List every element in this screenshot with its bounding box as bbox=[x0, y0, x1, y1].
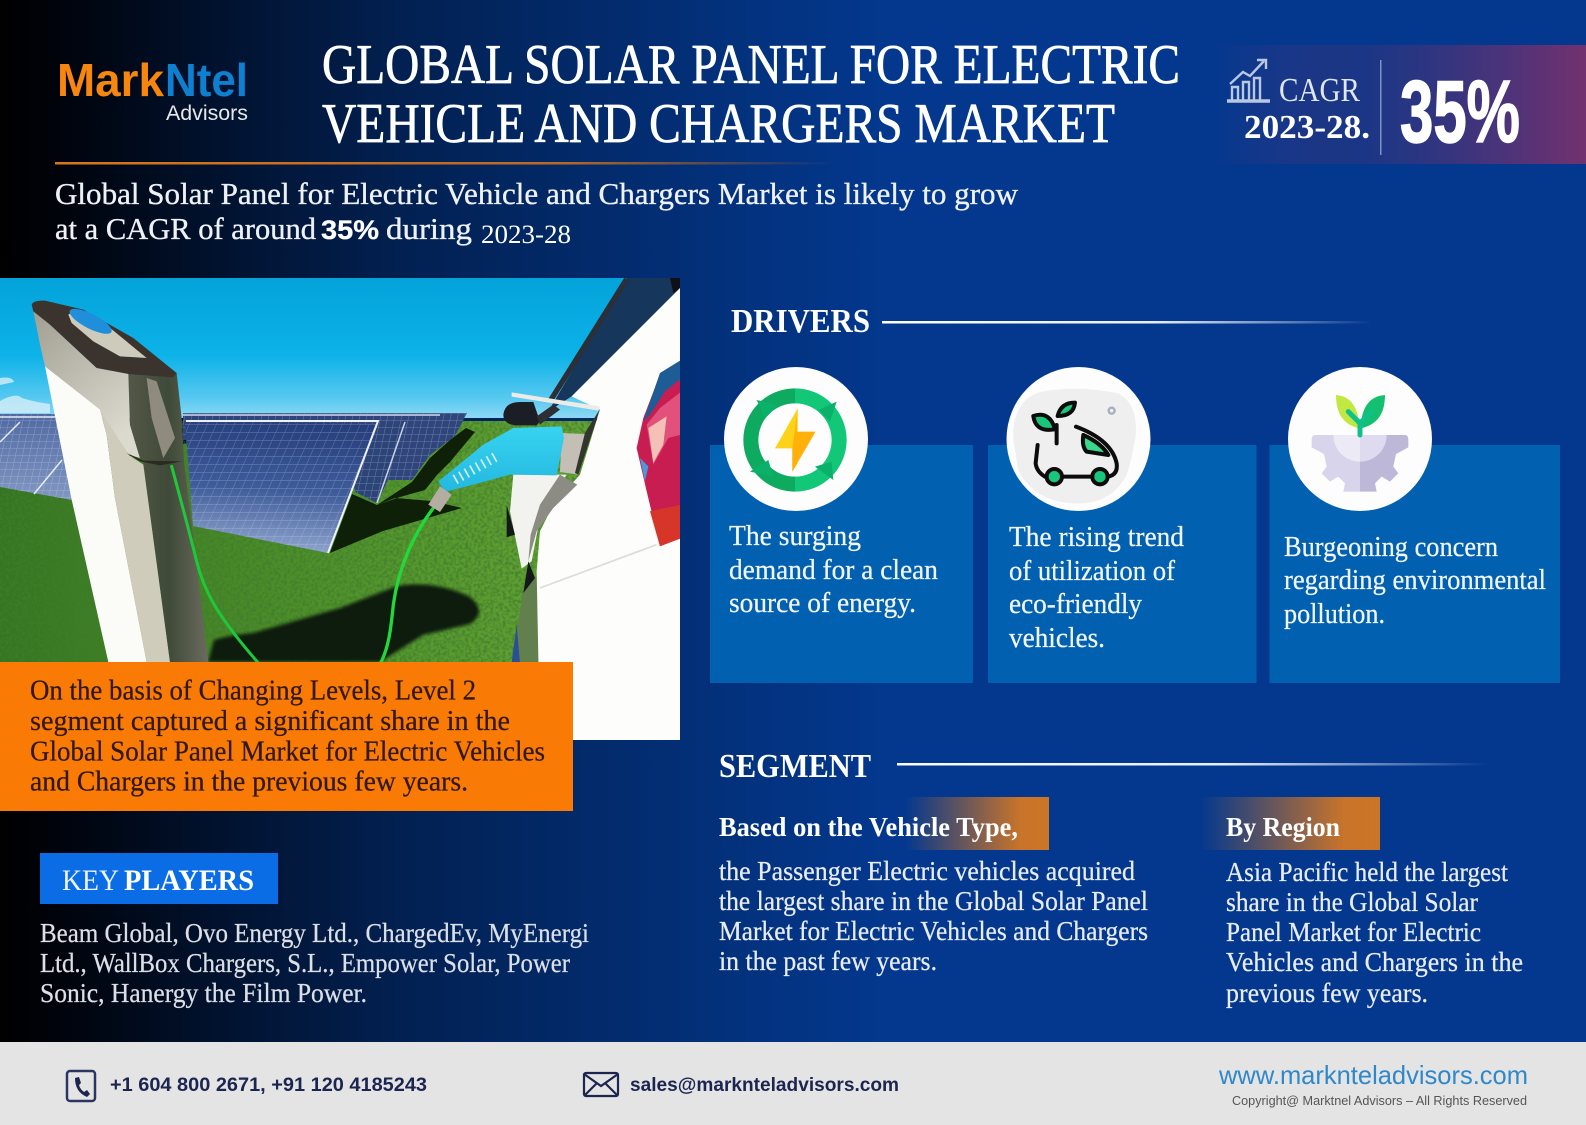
footer bbox=[0, 1042, 1586, 1125]
solar panels: back rows bbox=[183, 413, 467, 503]
callout: Level 2 segment bbox=[0, 662, 573, 811]
charging cables bbox=[172, 466, 433, 663]
tag highlight bbox=[905, 797, 1049, 850]
title bbox=[322, 34, 1180, 155]
body text: Vehicles and Chargers in the bbox=[1226, 947, 1523, 977]
key players list: Ltd., WallBox Chargers, S.L., Empower Solar, Power bbox=[40, 948, 570, 978]
callout: Level 2 segment: Global Solar Panel Market for Electric Vehicles bbox=[30, 736, 545, 768]
body text: the Passenger Electric vehicles acquired bbox=[719, 856, 1135, 886]
driver text: vehicles. bbox=[1009, 623, 1105, 654]
subtitle text: at a CAGR of around bbox=[55, 211, 316, 246]
mirror bbox=[503, 402, 540, 425]
title: GLOBAL SOLAR PANEL FOR ELECTRIC bbox=[322, 34, 1180, 96]
key players heading bbox=[40, 853, 278, 904]
subtitle text: 2023-28 bbox=[481, 220, 571, 249]
driver text: Burgeoning concern bbox=[1284, 532, 1498, 563]
key players heading: PLAYERS bbox=[124, 864, 254, 897]
body text bbox=[1226, 857, 1523, 1008]
callout: Level 2 segment: and Chargers in the previous few years. bbox=[30, 766, 468, 798]
clouds bbox=[0, 378, 50, 413]
key players list bbox=[40, 918, 589, 1008]
CAGR label: CAGR bbox=[1279, 72, 1360, 109]
body text: Market for Electric Vehicles and Chargers bbox=[719, 916, 1148, 946]
icon: phone bbox=[67, 1071, 95, 1101]
CAGR badge bbox=[1215, 45, 1586, 164]
driver text bbox=[1284, 532, 1546, 630]
period: 2023-28. bbox=[1244, 109, 1370, 146]
icon: envelope bbox=[584, 1073, 618, 1096]
key players heading: KEY bbox=[62, 864, 119, 897]
panel shadows bbox=[330, 428, 475, 553]
solar panels: left bbox=[0, 414, 72, 500]
charger shadow bbox=[208, 584, 479, 662]
door bbox=[537, 286, 682, 741]
tail light bbox=[636, 379, 680, 546]
segment heading: SEGMENT bbox=[719, 748, 871, 785]
icon: rising bar chart bbox=[1227, 60, 1270, 101]
panel: driver environmental pollution bbox=[1270, 367, 1560, 683]
segment: vehicle type bbox=[719, 797, 1148, 976]
body text: the largest share in the Global Solar Panel bbox=[719, 886, 1148, 916]
driver text bbox=[729, 521, 938, 619]
tag highlight bbox=[1200, 797, 1380, 850]
body text: Asia Pacific held the largest bbox=[1226, 857, 1508, 887]
tag label: Based on the Vehicle Type, bbox=[719, 812, 1018, 842]
driver text bbox=[1009, 522, 1184, 654]
35 percent value: 35% bbox=[1400, 62, 1520, 161]
title: VEHICLE AND CHARGERS MARKET bbox=[322, 93, 1115, 155]
segment: region bbox=[1200, 797, 1523, 1008]
body text: share in the Global Solar bbox=[1226, 887, 1478, 917]
subtitle text bbox=[55, 176, 1019, 249]
plug bbox=[438, 426, 564, 492]
car body bbox=[428, 278, 682, 741]
fender bbox=[510, 475, 567, 569]
driver text: eco-friendly bbox=[1009, 589, 1142, 620]
divider bbox=[1380, 60, 1382, 155]
driver text: source of energy. bbox=[729, 588, 916, 619]
body text bbox=[719, 856, 1148, 976]
icon: plant on gear bbox=[1312, 395, 1408, 492]
window bbox=[548, 278, 682, 411]
grass bbox=[0, 421, 620, 662]
logo: MarkNtel Advisors: Advisors bbox=[166, 102, 248, 125]
body text: Panel Market for Electric bbox=[1226, 917, 1481, 947]
subtitle text: during bbox=[386, 211, 472, 246]
subtitle text: Global Solar Panel for Electric Vehicle and Chargers Market is likely to grow bbox=[55, 176, 1019, 211]
subtitle text: 35% bbox=[321, 215, 379, 245]
panel: driver eco-friendly vehicles bbox=[988, 367, 1256, 683]
callout: Level 2 segment: segment captured a significant share in the bbox=[30, 706, 510, 737]
logo: MarkNtel Advisors bbox=[57, 54, 248, 125]
icon: eco car bbox=[1013, 389, 1136, 503]
body text: in the past few years. bbox=[719, 946, 937, 976]
title underline bbox=[55, 162, 835, 164]
body text: previous few years. bbox=[1226, 978, 1428, 1008]
copyright: Copyright@ Marktnel Advisors – All Rights Reserved bbox=[1232, 1094, 1527, 1108]
driver text: The rising trend bbox=[1009, 522, 1184, 553]
logo: MarkNtel Advisors: Ntel bbox=[165, 54, 248, 106]
drivers heading: DRIVERS bbox=[731, 303, 870, 340]
driver text: demand for a clean bbox=[729, 555, 938, 586]
logo: MarkNtel Advisors: Mark bbox=[57, 54, 164, 106]
driver text: The surging bbox=[729, 521, 861, 552]
charger post bbox=[32, 301, 208, 662]
callout: Level 2 segment: On the basis of Changing Levels, Level 2 bbox=[30, 676, 476, 706]
icon: energy cycle bolt bbox=[743, 388, 847, 492]
connector bbox=[560, 410, 600, 475]
tag label: By Region bbox=[1226, 812, 1340, 842]
driver text: regarding environmental bbox=[1284, 565, 1546, 596]
driver text: pollution. bbox=[1284, 599, 1385, 630]
phone numbers: +1 604 800 2671, +91 120 4185243 bbox=[110, 1075, 427, 1096]
panel: driver clean energy bbox=[710, 367, 973, 683]
badge gradient band bbox=[1215, 45, 1586, 164]
photo: EV charging beside solar farm bbox=[0, 278, 682, 741]
solar panel: main bbox=[185, 421, 405, 553]
email: sales@marknteladvisors.com bbox=[630, 1075, 899, 1096]
key players list: Sonic, Hanergy the Film Power. bbox=[40, 978, 367, 1008]
website: www.marknteladvisors.com bbox=[1218, 1060, 1528, 1090]
driver text: of utilization of bbox=[1009, 556, 1176, 587]
key players list: Beam Global, Ovo Energy Ltd., ChargedEv, MyEnergi bbox=[40, 918, 589, 948]
